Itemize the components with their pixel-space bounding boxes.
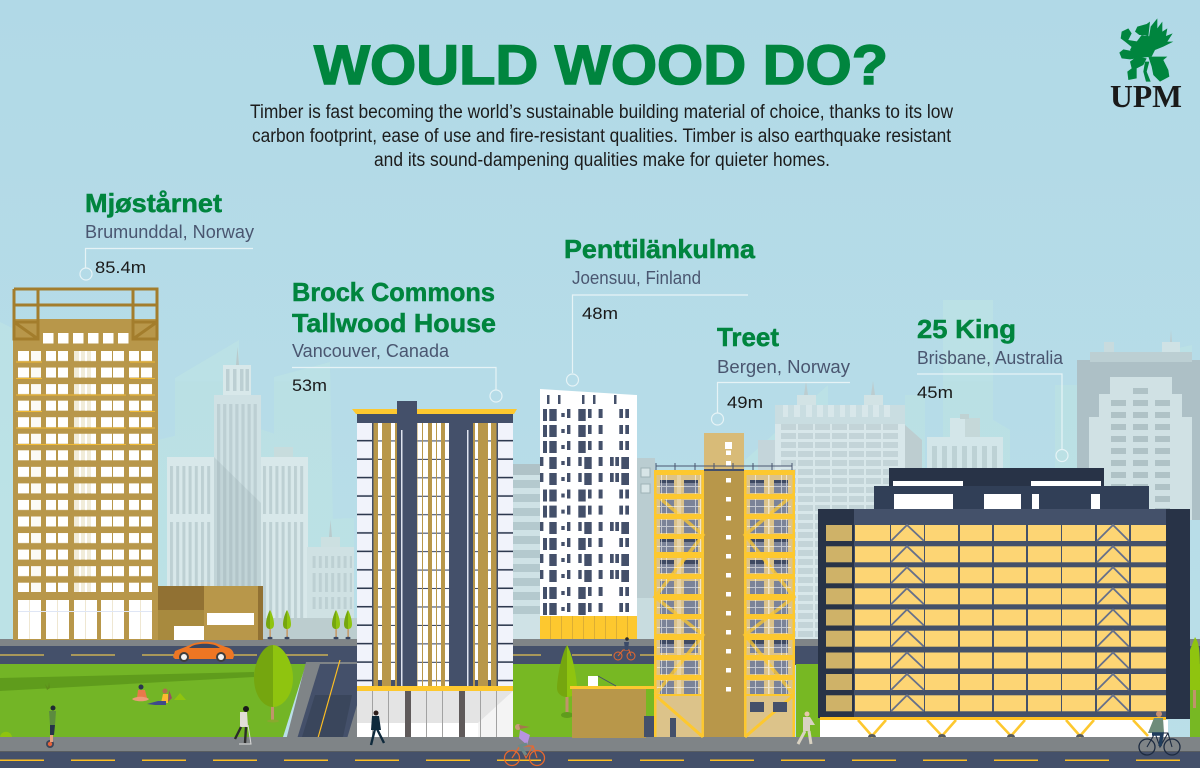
- label: Treet: Bergen, Norway: [717, 357, 850, 377]
- Treet braces: [655, 494, 794, 695]
- building: Treet: [654, 433, 795, 737]
- behind Brock and Penttila buildings: [513, 458, 655, 640]
- building: Mjostarnet tower: [13, 289, 158, 640]
- left skyscraper group: [167, 347, 357, 640]
- intro text: Timber is fast becoming the world’s sustainable building material of choice, thanks to its low: [250, 102, 953, 123]
- intro text: carbon footprint, ease of use and fire-resistant qualities. Timber is also earthquake resistant: [252, 126, 952, 147]
- label: Brock Commons: Brock Commons: [292, 277, 495, 307]
- person walking in suit: [371, 710, 384, 745]
- label: Brock Commons: Vancouver, Canada: [292, 341, 450, 361]
- Treet windows: [660, 480, 788, 694]
- small cyclist on far road: [614, 637, 635, 660]
- near road: [0, 752, 1200, 768]
- roof timber frame: [14, 289, 157, 339]
- far road: [0, 646, 1200, 665]
- label: Treet: Treet: [717, 322, 779, 352]
- building: 25 King: [818, 468, 1190, 737]
- label: 25 King: 45m: [917, 383, 953, 402]
- label: 25 King: Brisbane, Australia: [917, 348, 1064, 368]
- left lawn: [0, 664, 306, 737]
- intro text: and its sound-dampening qualities make for quieter homes.: [374, 150, 830, 171]
- person on hoverboard: [46, 706, 56, 748]
- car: [173, 642, 234, 662]
- far-right tree: [1190, 637, 1200, 708]
- building: Penttilankulma: [540, 389, 637, 639]
- Treet yellow floors: [654, 470, 795, 737]
- far sidewalk: [0, 639, 1200, 646]
- tree and low timber pavilion: [557, 645, 656, 738]
- label: Penttilankulma: [564, 234, 756, 386]
- pale teal silhouettes: [0, 300, 1192, 640]
- ground: roads, sidewalks and lawns: [0, 639, 1200, 768]
- label: Brock Commons: 53m: [292, 376, 327, 395]
- label: Treet: [712, 322, 850, 425]
- 25 King base: [820, 720, 1168, 737]
- building: Brock Commons Tallwood House: [352, 401, 517, 737]
- intro text: [250, 102, 953, 171]
- street trees: [266, 610, 352, 639]
- title: WOULD WOOD DO?: [314, 33, 888, 96]
- walking man in beige: [798, 712, 815, 744]
- person on scooter: [235, 706, 251, 744]
- building: low timber block beside Mjostarnet: [158, 586, 263, 640]
- right tower: [1077, 330, 1200, 520]
- UPM logo: [1110, 18, 1182, 114]
- Treet core lights: [725, 442, 732, 692]
- near sidewalk: [0, 737, 1200, 751]
- large lawn tree: [254, 645, 293, 722]
- label: 25 King: 25 King: [917, 314, 1016, 344]
- cyclist in lilac top: [504, 724, 544, 766]
- 25 King rooftop levels: [889, 468, 1104, 488]
- Treet dark window heads: [660, 480, 788, 644]
- background city skyline: [0, 300, 1200, 640]
- label: Mjostarnet: 85.4m: [95, 258, 146, 277]
- label: Mjostarnet: [80, 188, 254, 280]
- label: 25 King: [917, 314, 1068, 462]
- people on the lawn: [0, 682, 186, 737]
- 25 King facade: [818, 509, 1190, 718]
- griffin emblem: [1119, 18, 1173, 82]
- side street: [283, 662, 360, 752]
- label: Penttilankulma: Penttilänkulma: [564, 234, 756, 264]
- label: Treet: 49m: [727, 393, 763, 412]
- Treet white mullions: [657, 475, 791, 695]
- central office tower: [758, 381, 922, 640]
- label: Penttilankulma: 48m: [582, 304, 618, 323]
- cyclist in green top: [1139, 711, 1180, 755]
- label: Mjostarnet: Mjøstårnet: [85, 188, 222, 218]
- UPM logo: UPM: [1110, 78, 1182, 114]
- label: Brock Commons: Tallwood House: [292, 308, 496, 338]
- label: Brock Commons: [292, 277, 502, 402]
- building behind 25 King: [927, 414, 1003, 477]
- right lawn: [513, 664, 654, 738]
- label: Mjostarnet: Brumunddal, Norway: [85, 222, 254, 242]
- label: Penttilankulma: Joensuu, Finland: [572, 268, 701, 288]
